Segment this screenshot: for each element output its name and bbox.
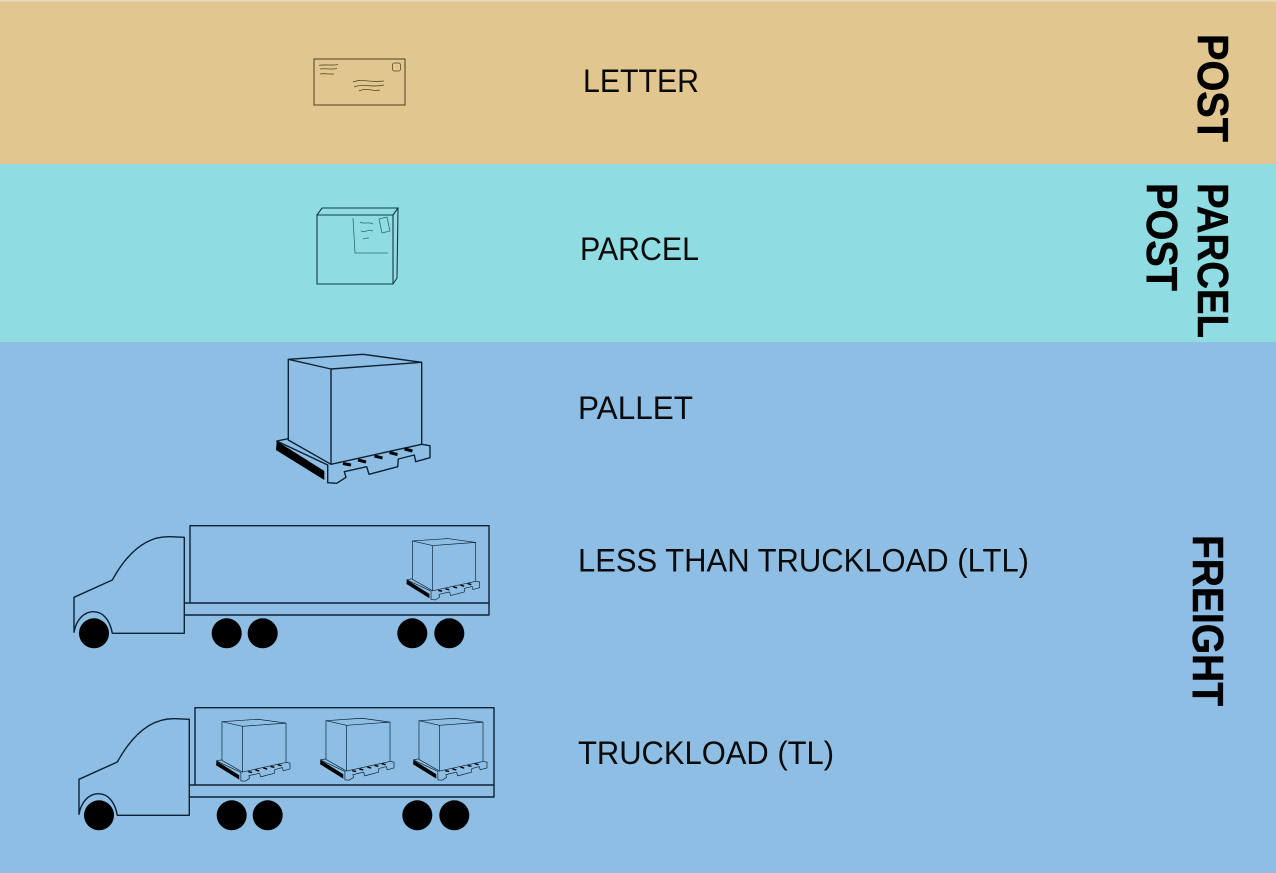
icon: parcel box — [317, 208, 398, 284]
heading: freight: FREIGHT — [1183, 535, 1232, 706]
panel: parcel post band — [0, 164, 1276, 342]
heading: parcel post — [1137, 183, 1237, 338]
icon: letter envelope — [314, 59, 405, 105]
icon: full truckload truck — [79, 708, 494, 830]
label: truckload: TRUCKLOAD (TL) — [578, 735, 834, 771]
icon: pallet — [276, 354, 430, 483]
heading: parcel post: POST — [1137, 183, 1186, 291]
panel: post band — [0, 0, 1276, 164]
heading: parcel post: PARCEL — [1188, 183, 1237, 338]
heading: post: POST — [1188, 34, 1237, 142]
label: pallet: PALLET — [578, 390, 693, 426]
label: less than truckload: LESS THAN TRUCKLOAD (LTL) — [578, 542, 1029, 578]
icon: less than truckload truck — [74, 526, 489, 648]
label: parcel: PARCEL — [580, 231, 699, 267]
label: letter: LETTER — [583, 63, 699, 99]
panel: freight band — [0, 342, 1276, 873]
